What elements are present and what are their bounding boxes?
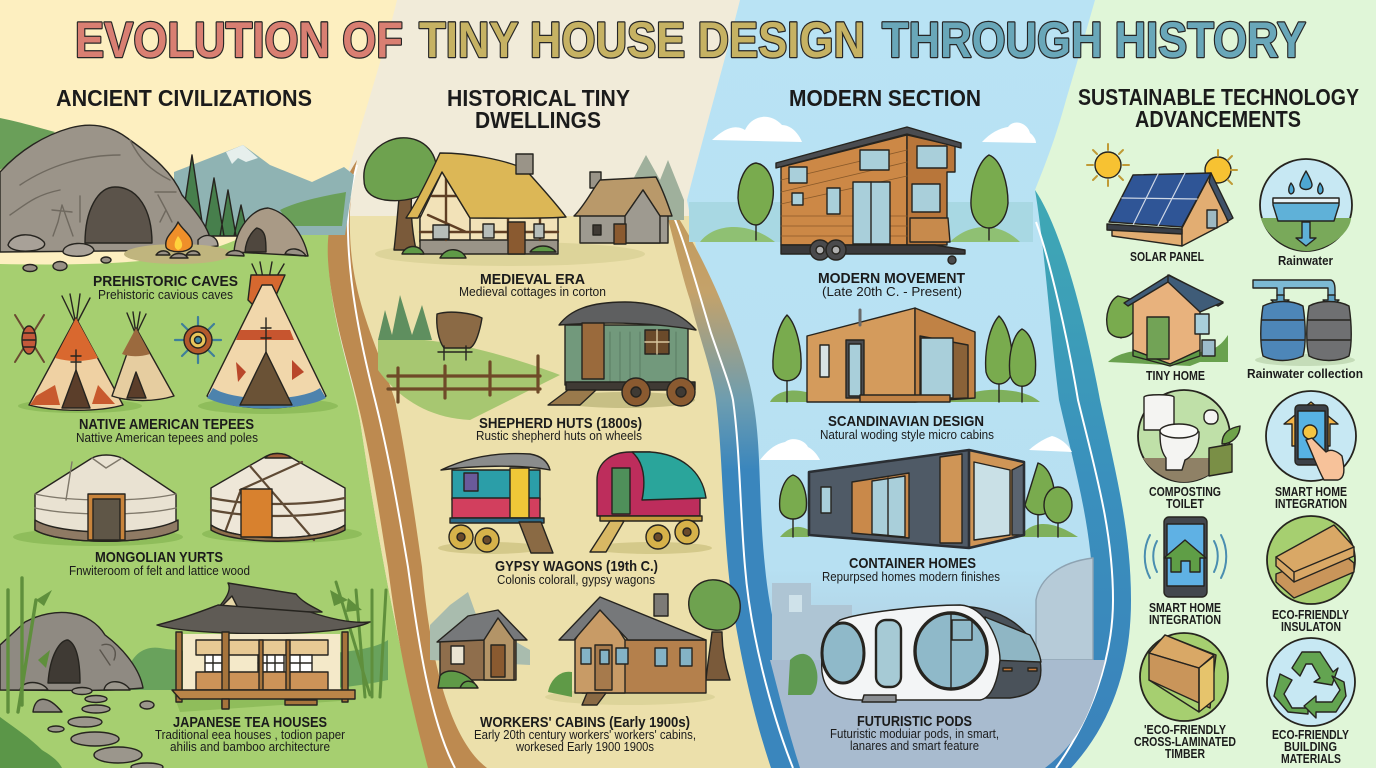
illustration: scandinavian cabin <box>770 308 1040 402</box>
label: rainwater collection: Rainwater collection <box>1247 367 1363 381</box>
panel: historical tiny dwellings <box>364 85 740 754</box>
label: native american tepees <box>76 416 258 445</box>
heading: modern section: MODERN SECTION <box>789 85 981 111</box>
decorative winding band: ancient to historical <box>328 160 487 768</box>
title: THROUGH HISTORY <box>882 12 1306 68</box>
label: eco-friendly building materials <box>1272 728 1350 766</box>
label: scandinavian design: Natural woding style micro cabins <box>820 427 994 442</box>
label: gypsy wagons <box>495 558 658 587</box>
label: medieval era: MEDIEVAL ERA <box>480 271 585 288</box>
icon: cross-laminated timber <box>1140 633 1228 721</box>
label: shepherd huts: SHEPHERD HUTS (1800s) <box>479 415 642 432</box>
icon: solar panel house <box>1087 144 1237 246</box>
label: mongolian yurts <box>69 549 250 578</box>
label: eco-friendly building materials: BUILDING <box>1284 740 1337 754</box>
label: eco-friendly insulation <box>1272 608 1350 634</box>
illustration: shepherd huts <box>378 295 696 420</box>
label: gypsy wagons: GYPSY WAGONS (19th C.) <box>495 558 658 575</box>
label: workers' cabins: WORKERS' CABINS (Early 1900s) <box>480 714 690 731</box>
decorative winding band: modern to sustainable <box>1035 190 1131 768</box>
label: composting toilet: COMPOSTING <box>1149 485 1221 499</box>
title <box>75 12 1306 68</box>
label: japanese tea houses: Traditional eea houses , todion paper <box>155 727 346 742</box>
label: container homes <box>822 555 1000 584</box>
label: cross-laminated timber: CROSS-LAMINATED <box>1134 735 1236 749</box>
label: composting toilet: TOILET <box>1166 497 1204 511</box>
icon: composting toilet <box>1138 390 1240 482</box>
icon: smart phone home <box>1145 517 1226 597</box>
label: medieval era <box>459 271 606 299</box>
title: TINY HOUSE DESIGN <box>419 12 865 68</box>
icon: recycling <box>1267 638 1355 726</box>
label: solar panel: SOLAR PANEL <box>1130 250 1204 264</box>
label: gypsy wagons: Colonis colorall, gypsy wagons <box>497 572 655 587</box>
label: container homes: Repurpsed homes modern finishes <box>822 569 1000 584</box>
label: scandinavian design <box>820 413 994 442</box>
label: futuristic pods <box>830 713 999 753</box>
label: modern movement: MODERN MOVEMENT <box>818 270 965 287</box>
heading second line: DWELLINGS <box>475 107 601 133</box>
label: japanese tea houses: ahilis and bamboo architecture <box>170 739 330 754</box>
label: scandinavian design: SCANDINAVIAN DESIGN <box>828 413 984 430</box>
illustration: medieval cottages <box>364 138 684 266</box>
label: smart home integration <box>1275 485 1347 511</box>
label: workers' cabins <box>474 714 696 754</box>
panel: modern section <box>689 85 1105 768</box>
label: workers' cabins: workesed Early 1900 1900s <box>515 739 654 754</box>
label: smart home integration: INTEGRATION <box>1275 497 1347 511</box>
label: prehistoric caves: Prehistoric cavious caves <box>98 287 233 302</box>
illustration: native american tepees <box>15 262 338 414</box>
heading: ancient civilizations: ANCIENT CIVILIZATIONS <box>56 85 312 111</box>
label: smart home integration 2: SMART HOME <box>1149 601 1221 615</box>
label: container homes: CONTAINER HOMES <box>849 555 976 572</box>
illustration: mongolian yurts <box>13 454 362 546</box>
label: prehistoric caves <box>93 273 238 302</box>
title: EVOLUTION OF <box>75 12 403 68</box>
label: cross-laminated timber: 'ECO-FRIENDLY <box>1144 723 1227 737</box>
illustration: modern movement tiny house <box>689 117 1036 264</box>
illustration: futuristic pod <box>770 558 1105 768</box>
label: futuristic pods: lanares and smart feature <box>850 738 979 753</box>
label: smart home integration 2: INTEGRATION <box>1149 613 1221 627</box>
label: eco-friendly building materials: ECO-FRIENDLY <box>1272 728 1350 742</box>
label: composting toilet <box>1149 485 1221 511</box>
icon: rainwater <box>1260 159 1352 251</box>
illustration: prehistoric caves <box>0 118 354 272</box>
label: prehistoric caves: PREHISTORIC CAVES <box>93 273 238 290</box>
label: futuristic pods: Futuristic moduiar pods, in smart, <box>830 726 999 741</box>
label: cross-laminated timber <box>1134 723 1236 761</box>
label: smart home integration: SMART HOME <box>1275 485 1347 499</box>
label: shepherd huts: Rustic shepherd huts on wheels <box>476 428 642 443</box>
label: modern movement: (Late 20th C. - Present) <box>822 284 962 299</box>
label: mongolian yurts: Fnwiteroom of felt and lattice wood <box>69 563 250 578</box>
heading second line: ADVANCEMENTS <box>1135 106 1301 132</box>
label: eco-friendly building materials: MATERIALS <box>1281 752 1341 766</box>
illustration: container home <box>760 436 1078 548</box>
illustration: workers' cabins <box>430 580 740 705</box>
panel: sustainable technology advancements <box>1078 84 1363 766</box>
icon: tiny home <box>1107 275 1228 366</box>
label: eco-friendly insulation: INSULATON <box>1281 620 1341 634</box>
label: japanese tea houses <box>155 714 346 754</box>
label: native american tepees: NATIVE AMERICAN TEPEES <box>79 416 254 433</box>
label: modern movement <box>818 270 965 299</box>
label: workers' cabins: Early 20th century workers' workers' cabins, <box>474 727 696 742</box>
label: eco-friendly insulation: ECO-FRIENDLY <box>1272 608 1350 622</box>
label: tiny home: TINY HOME <box>1146 369 1205 383</box>
label: futuristic pods: FUTURISTIC PODS <box>857 713 972 730</box>
label: medieval era: Medieval cottages in corton <box>459 284 606 299</box>
illustration: gypsy wagons <box>438 452 712 554</box>
label: mongolian yurts: MONGOLIAN YURTS <box>95 549 223 566</box>
icon: smart home hand <box>1266 391 1356 481</box>
panel: ancient civilizations <box>0 85 388 768</box>
icon: rainwater collection barrels <box>1253 280 1355 366</box>
illustration: japanese tea houses <box>0 578 388 768</box>
label: native american tepees: Nattive American tepees and poles <box>76 430 258 445</box>
label: cross-laminated timber: TIMBER <box>1165 747 1205 761</box>
label: shepherd huts <box>476 415 642 443</box>
icon: eco-friendly insulation <box>1267 516 1355 604</box>
decorative winding band: historical to modern <box>660 192 818 768</box>
label: japanese tea houses: JAPANESE TEA HOUSES <box>173 714 327 731</box>
label: rainwater: Rainwater <box>1278 254 1333 268</box>
heading: historical tiny dwellings: HISTORICAL TINY <box>447 85 630 111</box>
label: smart home integration 2 <box>1149 601 1221 627</box>
